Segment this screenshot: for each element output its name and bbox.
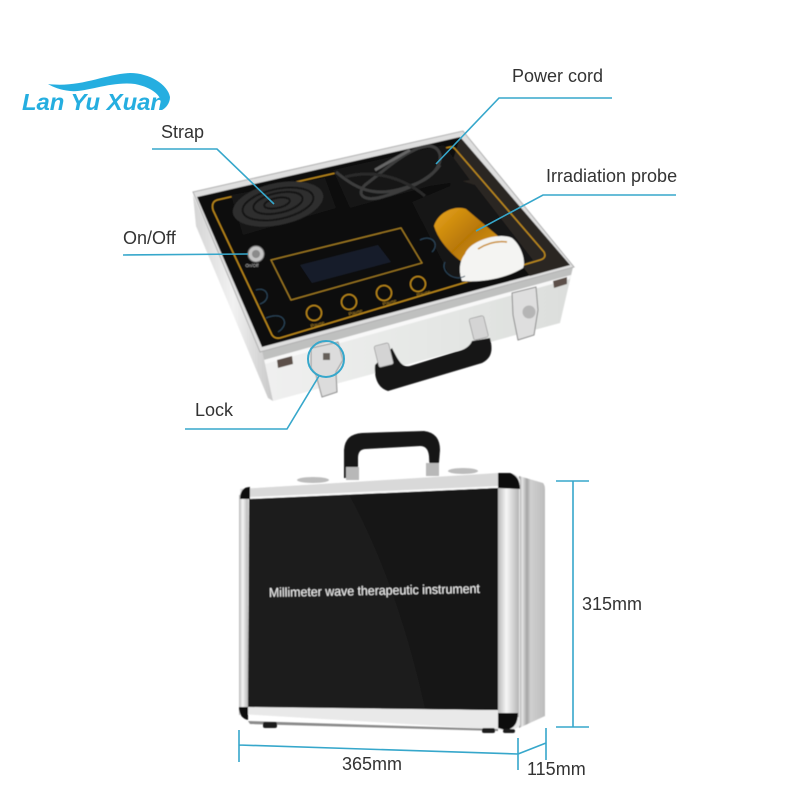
logo wave swoosh	[48, 73, 170, 110]
dimension: depth	[518, 728, 546, 760]
button labels: Pause	[348, 308, 364, 318]
power cord compartment	[333, 145, 470, 208]
callout lines	[123, 98, 676, 770]
handle	[344, 431, 440, 478]
panel right brown sheen	[450, 137, 570, 276]
open case photo	[193, 131, 574, 401]
irradiation probe	[434, 208, 524, 281]
label: 115mm: 115mm	[527, 759, 586, 779]
case front wall	[260, 267, 573, 401]
lock highlight ring	[308, 341, 344, 377]
case left wall	[193, 195, 273, 401]
closed case photo	[239, 431, 545, 733]
button labels: Pause	[382, 298, 398, 308]
black face	[248, 488, 498, 710]
case feet	[263, 722, 515, 733]
top frame highlight	[249, 486, 498, 499]
side panel	[519, 476, 545, 728]
LCD screen	[300, 245, 391, 283]
probe compartment	[412, 178, 533, 282]
callout line: irradiation probe	[476, 195, 676, 231]
button labels: Pause	[416, 289, 432, 299]
button labels	[310, 289, 432, 330]
case rim	[193, 131, 574, 352]
top latches	[297, 468, 478, 483]
left frame post	[239, 495, 248, 715]
callout line: power cord	[436, 98, 612, 164]
front wall chrome strip	[261, 267, 573, 360]
label: Lock: Lock	[195, 400, 234, 420]
silver frame	[240, 473, 520, 730]
logo wordmark: Lan Yu Xuan	[22, 89, 165, 115]
gold outline	[212, 147, 545, 338]
display frame	[271, 228, 422, 300]
decorative floral print	[256, 238, 465, 332]
on/off button: On/Off	[245, 263, 259, 268]
label: Power cord: Power cord	[512, 66, 603, 86]
bottom frame shadow	[248, 721, 498, 731]
carrying handle	[374, 315, 491, 391]
on/off button	[245, 246, 264, 268]
label: 315mm: 315mm	[582, 594, 642, 614]
callout line: strap	[152, 149, 274, 204]
front lock	[311, 342, 343, 397]
front wall highlight	[264, 275, 571, 364]
callout line: lock	[185, 376, 319, 429]
black control panel	[197, 137, 570, 347]
dimension: width	[239, 730, 518, 770]
glossy reflection	[349, 488, 498, 710]
top frame bar	[240, 473, 498, 499]
label: 365mm: 365mm	[342, 754, 402, 774]
button labels: Pause	[310, 320, 326, 330]
label: On/Off: On/Off	[123, 228, 177, 248]
handle brackets	[346, 463, 439, 480]
label: Strap: Strap	[161, 122, 204, 142]
logo: Lan Yu Xuan	[22, 73, 170, 115]
strap compartment	[229, 174, 336, 235]
corner brackets	[277, 277, 567, 368]
right lock	[512, 287, 538, 340]
callout line: on/off	[123, 254, 248, 255]
four gold buttons	[306, 276, 426, 320]
label: Irradiation probe: Irradiation probe	[546, 166, 677, 186]
case title text: Millimeter wave therapeutic instrument	[269, 581, 480, 600]
right frame post	[498, 487, 519, 717]
corner caps	[239, 473, 520, 730]
dimension: height	[556, 481, 589, 727]
